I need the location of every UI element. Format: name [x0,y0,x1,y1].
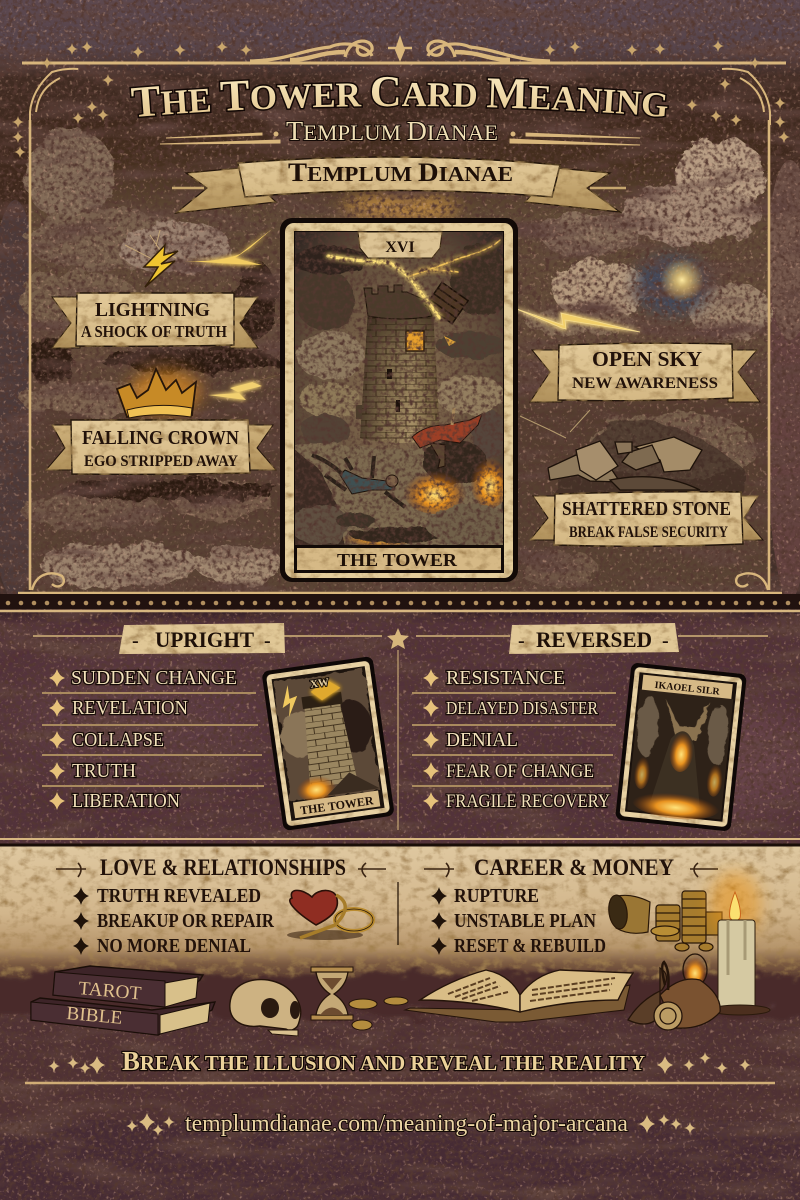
open sky patch [634,255,710,315]
section: upright / reversed headers [33,623,768,654]
label: Open Sky [530,343,760,402]
icon: Bible book: BIBLE [66,1003,123,1029]
list: upright meanings [42,667,264,812]
banner: Templum Dianae: TEMPLUM DIANAE [288,158,513,187]
heading: love & relationships: LOVE & RELATIONSHIPS [100,855,346,880]
header: upright: UPRIGHT [155,627,254,652]
footer url: templumdianae.com/meaning-of-major-arcana [185,1111,628,1137]
list: reversed meanings [412,667,616,812]
icon: coin pouch [628,954,720,1030]
clouds: left bank [20,129,284,587]
item: sudden change: SUDDEN CHANGE [71,667,237,689]
icon: hourglass [311,967,353,1020]
icon: star [387,628,409,649]
parchment fade into table [0,975,800,1015]
icon: cup and coins [607,891,722,951]
bottom table colour [0,1010,800,1200]
icon: heart and rings [287,890,373,940]
item: fragile recovery: FRAGILE RECOVERY [446,791,610,812]
card: small upright tower [261,656,395,831]
label: Open Sky: OPEN SKY [592,347,702,371]
card artwork [290,232,514,546]
label: Lightning: A SHOCK OF TRUTH [81,322,227,341]
divider: parchment top edge [0,838,800,840]
label: Shattered Stone: BREAK FALSE SECURITY [569,524,728,541]
illustration: shattered rocks [520,410,745,498]
small card art [273,668,381,805]
item: truth revealed: TRUTH REVEALED [97,885,261,907]
parchment section background [0,846,800,996]
icon: Tarot book: TAROT [78,978,143,1005]
header: upright: - [132,630,139,652]
divider: beaded band [0,594,800,611]
icon: scattered coins [349,997,408,1030]
card: small reversed [615,662,747,832]
falling roof [426,282,468,324]
header: upright: - [264,630,271,652]
card: small upright tower: THE TOWER [299,793,375,817]
card: small upright tower: XW [309,676,330,691]
label: Shattered Stone: SHATTERED STONE [562,498,731,520]
clouds: dark band left [28,260,280,501]
label: Falling Crown [46,420,276,474]
item: no more denial: NO MORE DENIAL [97,935,251,957]
panel: storm scene background [20,120,772,593]
clouds: right bank [520,137,772,588]
heading: career & money: CAREER & MONEY [474,855,674,880]
red falling figure [412,408,482,468]
label: Falling Crown: EGO STRIPPED AWAY [84,453,238,470]
small card art [627,689,733,824]
item: revelation: REVELATION [72,697,188,719]
banner: Templum Dianae [172,157,626,213]
card nameplate [297,548,501,570]
storm clouds [290,244,510,459]
item: denial: DENIAL [446,729,518,751]
subtitle side rules [160,132,640,145]
label: Lightning [52,293,258,348]
icon: lit candle [709,871,770,1015]
item: truth: TRUTH [72,760,136,782]
sky sun [660,258,704,302]
icon: Tarot book [53,966,203,1007]
artwork grain [295,232,503,545]
item: fear of change: FEAR OF CHANGE [446,761,594,782]
ground [295,443,503,545]
icon: Bible book [31,998,215,1035]
item: reset & rebuild: RESET & REBUILD [454,935,606,957]
panel: career & money [424,855,722,957]
item: delayed disaster: DELAYED DISASTER [446,698,598,718]
rubble [290,505,514,545]
arrow: open sky lightning [514,308,640,332]
item: breakup or repair: BREAKUP OR REPAIR [97,910,274,932]
footer rule [25,1082,775,1084]
label: Lightning: LIGHTNING [95,299,210,321]
icon: falling crown [117,369,201,418]
center glow above the card [340,194,460,222]
card: small reversed: IKAOEL SILR [654,680,721,698]
item: unstable plan: UNSTABLE PLAN [454,910,596,932]
tagline sparkles [48,1052,751,1074]
header: reversed: REVERSED [536,627,652,652]
header: reversed [509,623,679,654]
header: reversed: - [518,630,525,652]
icon: skull [230,980,301,1036]
tagline: BREAK THE ILLUSION AND REVEAL THE REALITY [122,1046,645,1076]
tower [356,285,440,443]
label: Falling Crown: FALLING CROWN [82,427,239,449]
icon: lightning bolt [125,229,272,287]
footer sparkles [126,1113,696,1136]
card plaque: XVI: XVI [385,239,415,256]
icon: open book [405,970,633,1022]
frame: ornate gold border [18,35,786,593]
card nameplate: THE TOWER [337,550,458,570]
card plaque: XVI [358,232,442,258]
subtitle: TEMPLUM DIANAE [286,116,498,146]
title: THE TOWER CARD MEANING [129,75,669,118]
label: Open Sky: NEW AWARENESS [572,375,718,392]
item: liberation: LIBERATION [72,790,180,812]
arrow: crown lightning [208,372,290,400]
header: upright [119,623,285,654]
ornament: top center flourish [250,35,550,62]
main card: The Tower [280,218,518,582]
item: resistance: RESISTANCE [446,667,565,689]
sparkles: top border row [12,40,790,158]
item: collapse: COLLAPSE [72,729,164,751]
panel: love & relationships [56,855,386,957]
label: Shattered Stone [530,492,763,546]
blue falling figure [312,455,405,507]
flames [343,460,503,545]
header: reversed: - [662,630,669,652]
tower lightning [328,240,500,318]
item: rupture: RUPTURE [454,885,539,907]
